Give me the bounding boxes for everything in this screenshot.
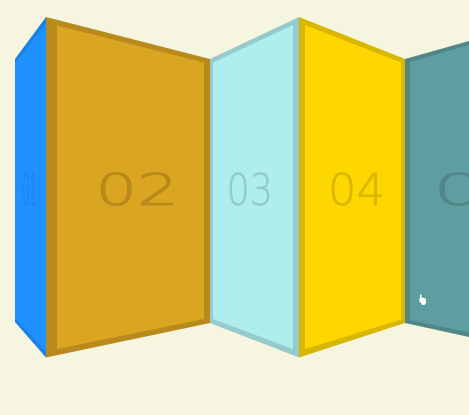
panel 03: pale turquoise (210, 17, 299, 358)
panel 04: yellow (299, 17, 405, 358)
folded panel infographic: 01 (22, 165, 36, 216)
panel 02: goldenrod (46, 17, 210, 358)
icon: hand cursor (419, 294, 426, 305)
number 03: 03 (227, 165, 273, 216)
number 02: 02 (96, 165, 178, 216)
panel 05: cadet blue, cropped at right edge (405, 41, 469, 337)
panel 01: blue (15, 17, 46, 358)
number 04: 04 (328, 165, 385, 216)
